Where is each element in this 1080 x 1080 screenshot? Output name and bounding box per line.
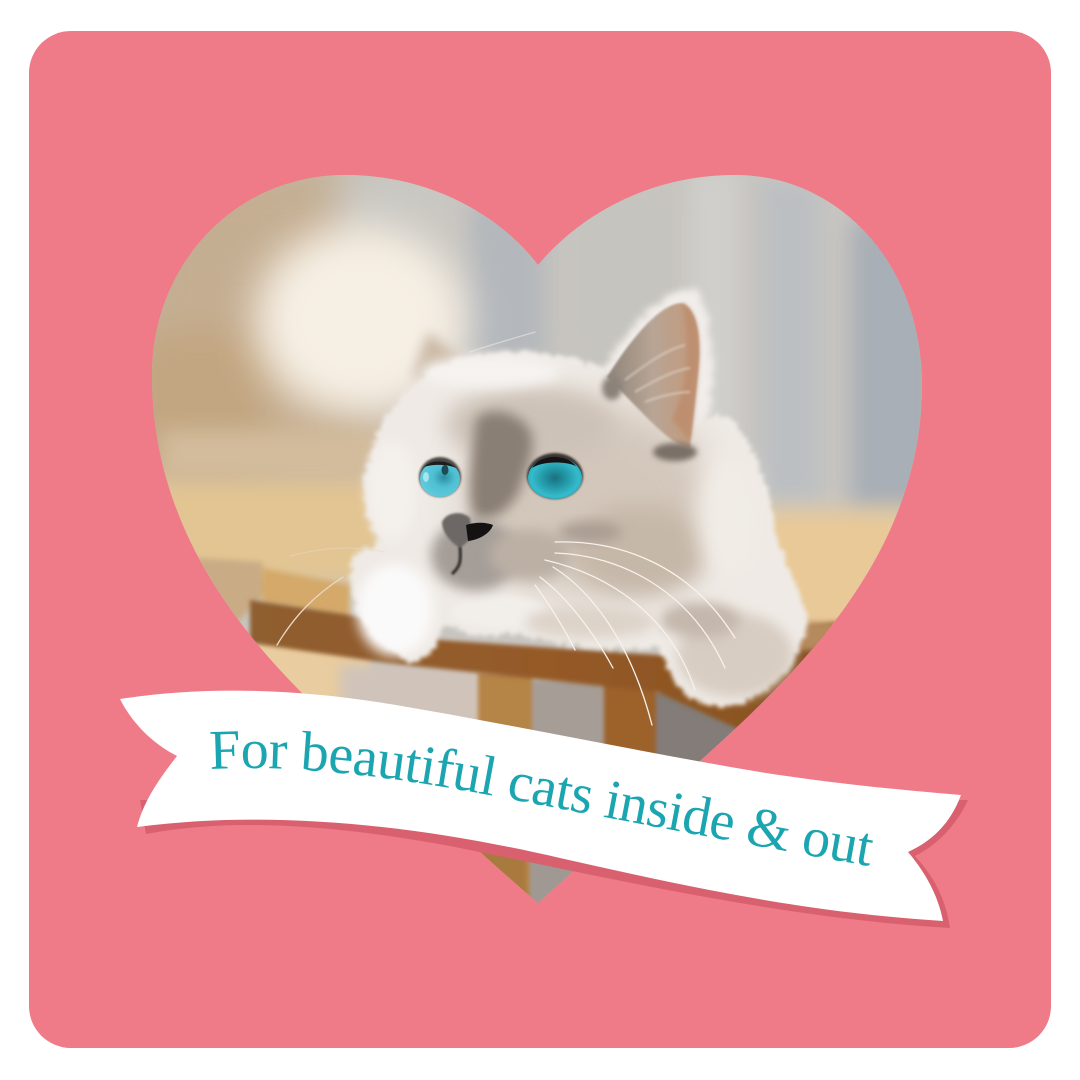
eye left [419,457,461,497]
ribbon banner [120,690,961,921]
heart photo: cat [152,175,922,903]
whiskers [277,332,735,725]
face mask [431,411,622,591]
fur shading [357,356,793,697]
far ear [412,332,474,378]
photo background [152,175,922,903]
ribbon text: For beautiful cats inside & out [210,730,873,866]
cat fur body [350,352,807,707]
white ear halo [600,288,714,450]
ribbon shadow [140,800,968,928]
nose and mouth [442,513,493,574]
near ear [602,303,699,461]
eye right [527,453,583,499]
wooden fence [196,558,840,912]
